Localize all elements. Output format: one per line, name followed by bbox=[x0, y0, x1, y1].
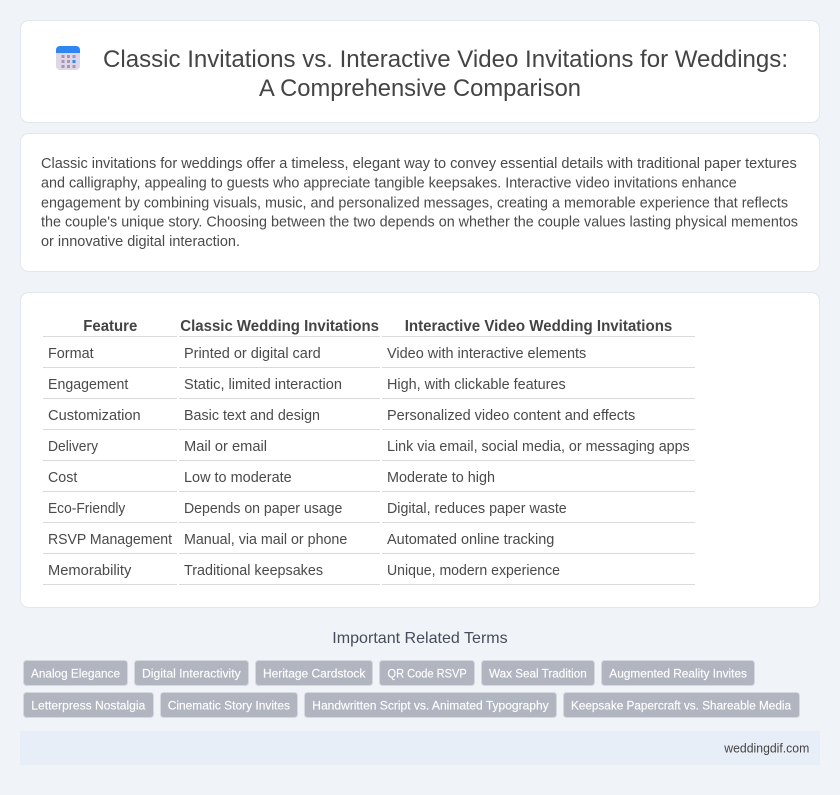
heading: Important Related Terms: Important Related Terms bbox=[332, 630, 508, 647]
table header bbox=[43, 318, 695, 337]
title: Classic Invitations vs. Interactive Video Invitations for Weddings: bbox=[103, 46, 788, 73]
panel: title header bbox=[20, 20, 820, 122]
tag: Heritage Cardstock: Heritage Cardstock bbox=[263, 666, 366, 680]
table row: Eco-Friendly: Digital, reduces paper waste bbox=[387, 501, 567, 517]
table row: Memorability: Traditional keepsakes bbox=[184, 563, 323, 579]
panel: comparison table bbox=[20, 292, 820, 608]
table row: RSVP Management: Manual, via mail or phone bbox=[184, 532, 347, 548]
tag: QR Code RSVP: QR Code RSVP bbox=[388, 666, 467, 680]
tag: Letterpress Nostalgia: Letterpress Nostalgia bbox=[31, 698, 145, 712]
tag: Keepsake Papercraft vs. Shareable Media bbox=[564, 692, 800, 718]
table header: Feature bbox=[83, 318, 137, 335]
tag: Cinematic Story Invites: Cinematic Story Invites bbox=[168, 698, 290, 712]
related term tags bbox=[24, 660, 800, 718]
table row: Memorability: Memorability bbox=[48, 563, 132, 579]
table row: Memorability: Unique, modern experience bbox=[387, 563, 560, 579]
title bbox=[103, 46, 788, 102]
tag: Augmented Reality Invites bbox=[602, 660, 754, 686]
table row: Eco-Friendly bbox=[43, 501, 695, 523]
table row: Customization bbox=[43, 408, 695, 430]
footer source: weddingdif.com bbox=[723, 740, 809, 755]
panel: introduction bbox=[20, 134, 820, 272]
table row: Engagement bbox=[43, 377, 695, 399]
table row: Memorability bbox=[43, 563, 695, 585]
table row: Customization: Customization bbox=[48, 408, 141, 424]
text block: introduction paragraph: and calligraphy, appealing to guests who appreciate tangible keepsakes. Interactive video invitations enhance bbox=[41, 176, 737, 192]
table row: Cost: Moderate to high bbox=[387, 470, 495, 486]
table row: Format: Format bbox=[48, 346, 94, 362]
tag: Heritage Cardstock bbox=[256, 660, 372, 686]
table row: Engagement: Engagement bbox=[48, 377, 128, 393]
table row: Eco-Friendly: Depends on paper usage bbox=[184, 501, 342, 517]
text block: introduction paragraph: engagement by combining visuals, music, and personalized messages, creating a memorable experience that reflects bbox=[41, 196, 788, 212]
tag: Handwritten Script vs. Animated Typography bbox=[304, 692, 556, 718]
table row: RSVP Management: RSVP Management bbox=[48, 532, 172, 548]
table row: Delivery: Link via email, social media, or messaging apps bbox=[387, 439, 690, 455]
tag: Wax Seal Tradition bbox=[482, 660, 594, 686]
icon: calendar bbox=[56, 46, 80, 70]
title: A Comprehensive Comparison bbox=[259, 75, 581, 102]
table row: Eco-Friendly: Eco-Friendly bbox=[48, 501, 126, 517]
text block: introduction paragraph: or innovative digital interaction. bbox=[41, 234, 240, 250]
table header: Interactive Video Wedding Invitations bbox=[405, 318, 672, 335]
text block: introduction paragraph: Classic invitations for weddings offer a timeless, elegant way to convey essential details with traditional paper textures bbox=[41, 156, 797, 172]
footer bar bbox=[20, 731, 820, 765]
tag: QR Code RSVP bbox=[380, 660, 474, 686]
table row: Customization: Personalized video content and effects bbox=[387, 408, 635, 424]
table row: Delivery: Delivery bbox=[48, 439, 99, 455]
tag: Keepsake Papercraft vs. Shareable Media: Keepsake Papercraft vs. Shareable Media bbox=[571, 698, 791, 712]
table row: Customization: Basic text and design bbox=[184, 408, 320, 424]
tag: Wax Seal Tradition: Wax Seal Tradition bbox=[489, 666, 587, 680]
tag: Analog Elegance: Analog Elegance bbox=[31, 666, 120, 680]
tag: Digital Interactivity: Digital Interactivity bbox=[142, 666, 241, 680]
table row: Format: Video with interactive elements bbox=[387, 346, 586, 362]
tag: Digital Interactivity bbox=[134, 660, 248, 686]
table row: Cost: Cost bbox=[48, 470, 77, 486]
table row: RSVP Management bbox=[43, 532, 695, 554]
table row: Delivery: Mail or email bbox=[184, 439, 267, 455]
table row: Cost bbox=[43, 470, 695, 492]
table row: Engagement: Static, limited interaction bbox=[184, 377, 342, 393]
table header: Classic Wedding Invitations bbox=[180, 318, 379, 335]
tag: Cinematic Story Invites bbox=[160, 692, 298, 718]
tag: Handwritten Script vs. Animated Typography: Handwritten Script vs. Animated Typography bbox=[312, 698, 549, 712]
table row: RSVP Management: Automated online tracking bbox=[387, 532, 554, 548]
text block: introduction paragraph: the couple's unique story. Choosing between the two depends on whether the couple values lasting physical mementos bbox=[41, 214, 798, 230]
tag: Augmented Reality Invites: Augmented Reality Invites bbox=[609, 666, 747, 680]
table row: Delivery bbox=[43, 439, 695, 461]
table row: Engagement: High, with clickable features bbox=[387, 377, 566, 393]
table row: Cost: Low to moderate bbox=[184, 470, 292, 486]
tag: Analog Elegance bbox=[24, 660, 128, 686]
tag: Letterpress Nostalgia bbox=[24, 692, 154, 718]
table row: Format: Printed or digital card bbox=[184, 346, 321, 362]
table row: Format bbox=[43, 346, 695, 368]
text block: introduction paragraph bbox=[41, 156, 798, 250]
